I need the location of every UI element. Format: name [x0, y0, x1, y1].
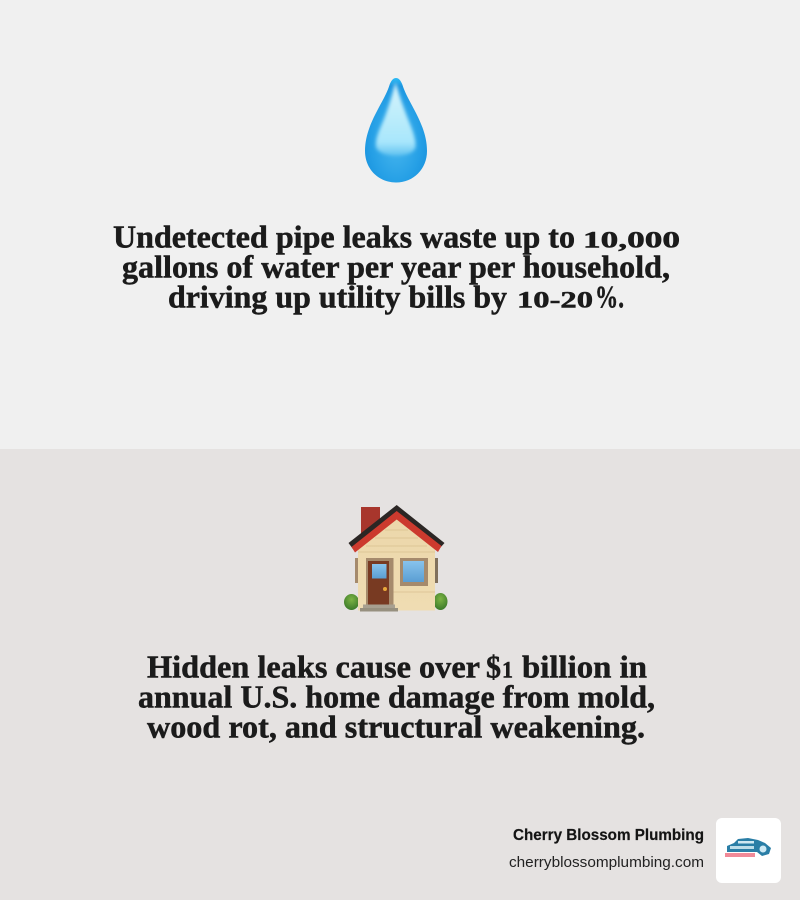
website: cherryblossomplumbing.com: [509, 854, 704, 871]
heading: water waste statistic: gallons of water per year per household,: [122, 248, 670, 284]
panel: home damage: [0, 449, 800, 900]
heading: home damage statistic: wood rot, and structural weakening.: [147, 708, 645, 744]
brand name: Cherry Blossom Plumbing: [513, 827, 704, 844]
heading: water waste statistic: Undetected pipe leaks waste up to: [113, 218, 575, 254]
heading: home damage statistic: $: [486, 648, 501, 684]
heading: water waste statistic: 10,000: [583, 228, 680, 252]
icon: water drop: [365, 78, 427, 182]
heading: home damage statistic: Hidden leaks cause over: [147, 648, 480, 684]
heading: home damage statistic: [138, 648, 655, 744]
heading: water waste statistic: %.: [595, 278, 624, 314]
logo: [716, 818, 781, 883]
heading: water waste statistic: 10-20: [517, 288, 593, 312]
heading: water waste statistic: driving up utility bills by: [168, 278, 507, 314]
panel: water waste: [0, 0, 800, 449]
heading: home damage statistic: billion in: [522, 648, 647, 684]
icon: house: [344, 505, 448, 612]
heading: water waste statistic: [113, 218, 680, 314]
heading: home damage statistic: 1: [502, 658, 513, 682]
footer: brand: [509, 818, 781, 883]
heading: home damage statistic: annual U.S. home damage from mold,: [138, 678, 655, 714]
